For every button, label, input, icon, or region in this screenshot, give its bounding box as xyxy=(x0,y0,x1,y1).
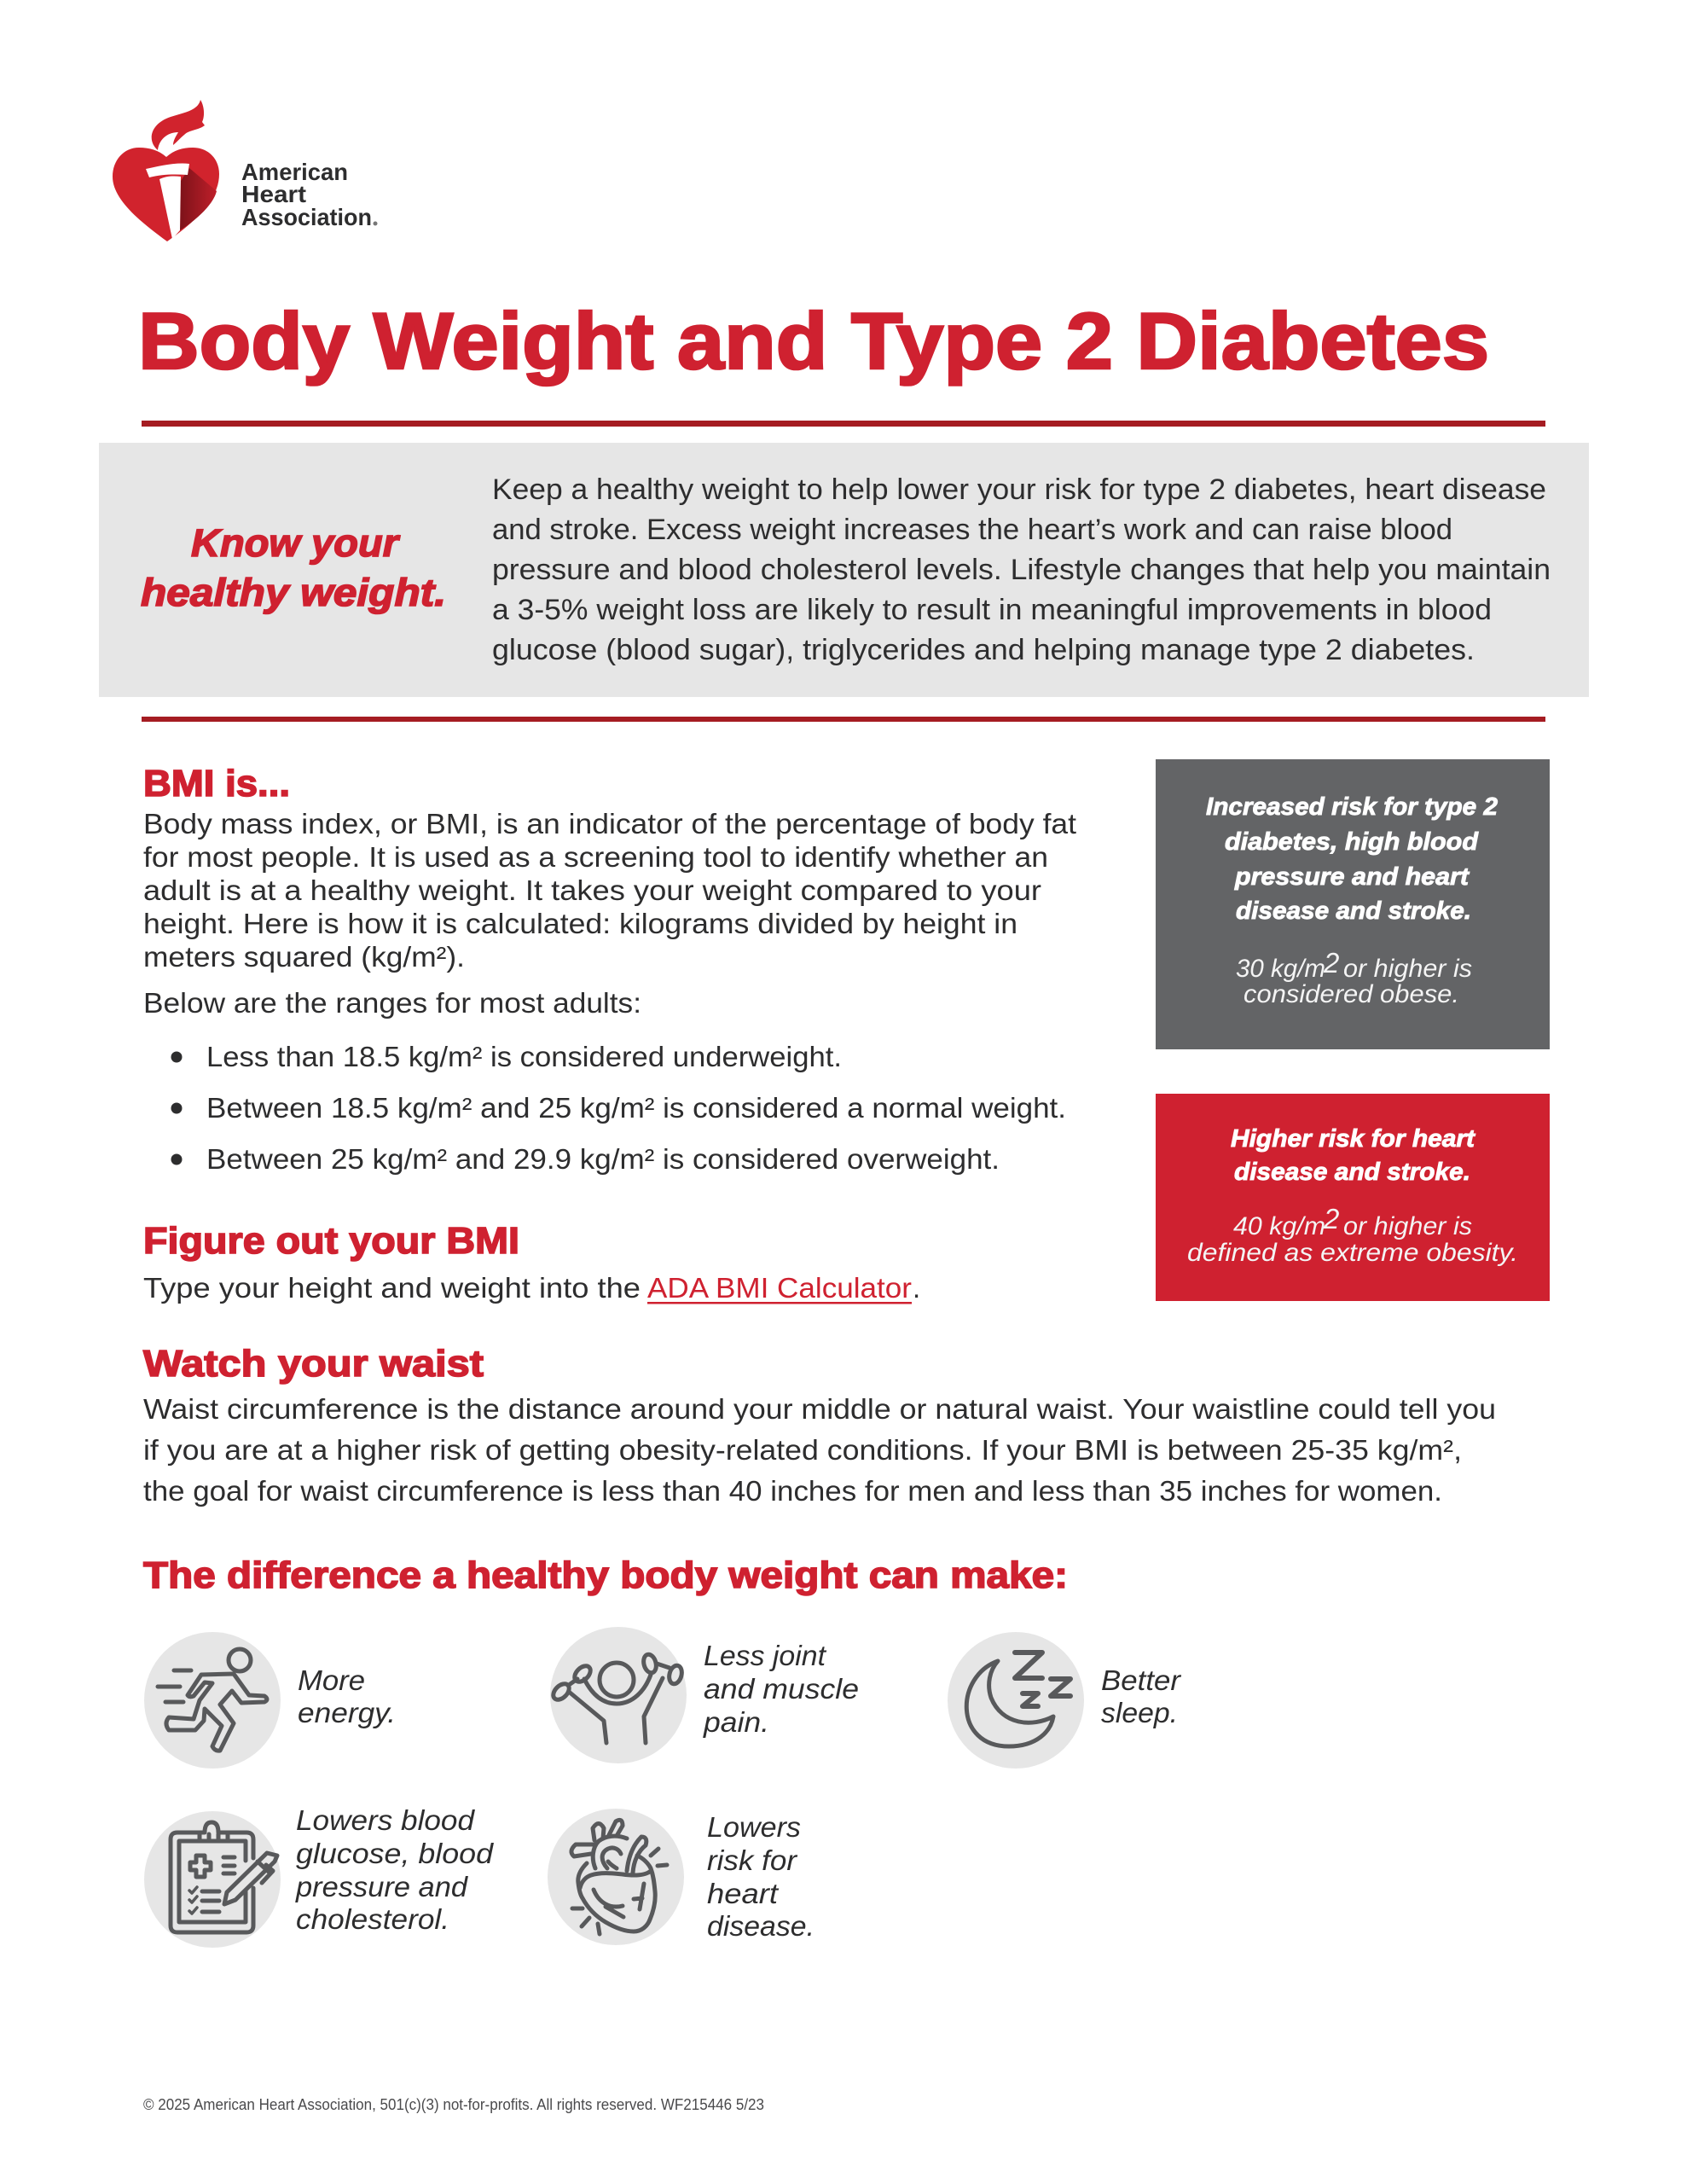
benefit: less joint and muscle pain xyxy=(550,1627,859,1763)
benefit text: risk for xyxy=(707,1844,798,1876)
callout detail: 2 xyxy=(1323,947,1339,979)
BMI description: for most people. It is used as a screening tool to identify whether an xyxy=(143,841,1048,873)
benefit: more energy xyxy=(144,1632,396,1769)
callout detail: 2 xyxy=(1323,1203,1339,1234)
calculator text with link: . xyxy=(913,1272,920,1304)
panel text: glucose (blood sugar), triglycerides and helping manage type 2 diabetes. xyxy=(492,634,1475,666)
callout heading: Higher risk for heart xyxy=(1231,1125,1475,1153)
BMI description: height. Here is how it is calculated: kilograms divided by height in xyxy=(143,908,1017,939)
callout background xyxy=(1156,1094,1550,1301)
callout heading: pressure and heart xyxy=(1234,863,1470,891)
panel text: Keep a healthy weight to help lower your risk for type 2 diabetes, heart disease xyxy=(492,473,1546,506)
BMI ranges list: Between 25 kg/m² and 29.9 kg/m² is considered overweight. xyxy=(206,1143,1000,1175)
benefit: better sleep xyxy=(948,1632,1182,1769)
panel text xyxy=(492,473,1551,666)
callout heading: disease and stroke. xyxy=(1234,1159,1470,1186)
BMI description: Body mass index, or BMI, is an indicator of the percentage of body fat xyxy=(143,808,1076,839)
callout background xyxy=(1156,759,1550,1049)
heading: The difference a healthy body weight can make: The difference a healthy body weight can make: xyxy=(143,1555,1068,1596)
callout heading: Increased risk for type 2 xyxy=(1206,793,1498,821)
benefit: lowers risk for heart disease xyxy=(548,1809,815,1945)
footer copyright: © 2025 American Heart Association, 501(c)(3) not-for-profits. All rights reserved. WF215446 5/23 xyxy=(143,2096,764,2113)
benefit text xyxy=(707,1811,815,1942)
benefit text: and muscle xyxy=(704,1673,859,1705)
callout detail xyxy=(1236,947,1472,1008)
icon: anatomical heart xyxy=(548,1809,684,1945)
callout detail: or higher is xyxy=(1343,955,1472,983)
panel text: and stroke. Excess weight increases the heart’s work and can raise blood xyxy=(492,514,1452,546)
BMI description: meters squared (kg/m²). xyxy=(143,941,465,973)
calculator text with link xyxy=(143,1272,920,1304)
logo heart and torch xyxy=(113,100,219,241)
icon: moon and Zs xyxy=(948,1632,1084,1769)
benefit text: disease. xyxy=(707,1910,815,1942)
waist text xyxy=(143,1393,1496,1507)
BMI ranges list: Less than 18.5 kg/m² is considered underweight. xyxy=(206,1041,842,1072)
benefit: lowers blood glucose, blood pressure and cholesterol xyxy=(144,1804,495,1948)
BMI description: adult is at a healthy weight. It takes your weight compared to your xyxy=(143,874,1041,906)
benefit text: cholesterol. xyxy=(296,1903,449,1935)
waist text: the goal for waist circumference is less than 40 inches for men and less than 35 inches for women. xyxy=(143,1475,1442,1507)
panel heading: healthy weight. xyxy=(141,571,446,614)
callout detail xyxy=(1187,1203,1518,1267)
icon: person lifting dumbbells xyxy=(550,1627,687,1763)
BMI ranges list xyxy=(171,1041,1066,1175)
callout detail: considered obese. xyxy=(1244,980,1459,1008)
BMI ranges list: Between 18.5 kg/m² and 25 kg/m² is considered a normal weight. xyxy=(206,1092,1066,1124)
logo wordmark xyxy=(241,159,377,230)
benefit text: Better xyxy=(1101,1664,1182,1696)
title: Body Weight and Type 2 Diabetes xyxy=(138,296,1489,386)
benefit text xyxy=(298,1664,396,1728)
panel heading: Know your xyxy=(191,521,401,565)
waist text: Waist circumference is the distance around your middle or natural waist. Your waistline could tell you xyxy=(143,1393,1496,1425)
callout heading xyxy=(1231,1125,1475,1186)
calculator text with link: ADA BMI Calculator xyxy=(647,1272,912,1304)
panel text: a 3-5% weight loss are likely to result in meaningful improvements in blood xyxy=(492,594,1492,626)
BMI description xyxy=(143,808,1076,973)
panel text: pressure and blood cholesterol levels. Lifestyle changes that help you maintain xyxy=(492,554,1551,586)
panel: know your healthy weight xyxy=(99,443,1589,697)
benefit text: Lowers blood xyxy=(296,1804,476,1836)
benefit text: More xyxy=(298,1664,365,1696)
benefit text: glucose, blood xyxy=(296,1838,495,1869)
callout heading: diabetes, high blood xyxy=(1225,828,1479,856)
callout heading: disease and stroke. xyxy=(1236,897,1471,925)
benefit text: Lowers xyxy=(707,1811,801,1843)
callout detail: 40 kg/m xyxy=(1233,1212,1325,1240)
icon: clipboard and pen xyxy=(144,1811,281,1948)
icon: runner xyxy=(144,1632,281,1769)
benefit text xyxy=(295,1804,495,1935)
benefit text xyxy=(703,1640,859,1738)
panel heading xyxy=(141,521,446,614)
callout detail: defined as extreme obesity. xyxy=(1187,1239,1518,1267)
logo wordmark: Heart xyxy=(241,181,306,207)
waist text: if you are at a higher risk of getting obesity-related conditions. If your BMI is between 25-35 kg/m², xyxy=(143,1434,1462,1466)
heading: Watch your waist: Watch your waist xyxy=(143,1344,484,1385)
benefit text: pressure and xyxy=(295,1871,469,1902)
panel: extreme obesity callout xyxy=(1156,1094,1550,1301)
benefit text xyxy=(1101,1664,1182,1728)
panel: obese risk callout xyxy=(1156,759,1550,1049)
heading: Figure out your BMI: Figure out your BMI xyxy=(143,1221,519,1262)
panel background xyxy=(99,443,1589,697)
callout detail: or higher is xyxy=(1343,1212,1472,1240)
logo: American Heart Association xyxy=(113,100,377,241)
benefit text: pain. xyxy=(703,1706,769,1738)
benefit text: sleep. xyxy=(1101,1697,1178,1728)
callout heading xyxy=(1206,793,1498,925)
callout detail: 30 kg/m xyxy=(1236,955,1325,983)
logo wordmark: Association xyxy=(241,204,372,230)
benefit text: Less joint xyxy=(704,1640,827,1671)
benefit text: energy. xyxy=(298,1697,396,1728)
logo wordmark: American xyxy=(241,159,348,185)
heading: BMI is: BMI is... xyxy=(143,764,290,804)
ranges intro: Below are the ranges for most adults: xyxy=(143,987,641,1019)
benefit text: heart xyxy=(707,1878,780,1909)
calculator text with link: Type your height and weight into the xyxy=(143,1272,641,1304)
